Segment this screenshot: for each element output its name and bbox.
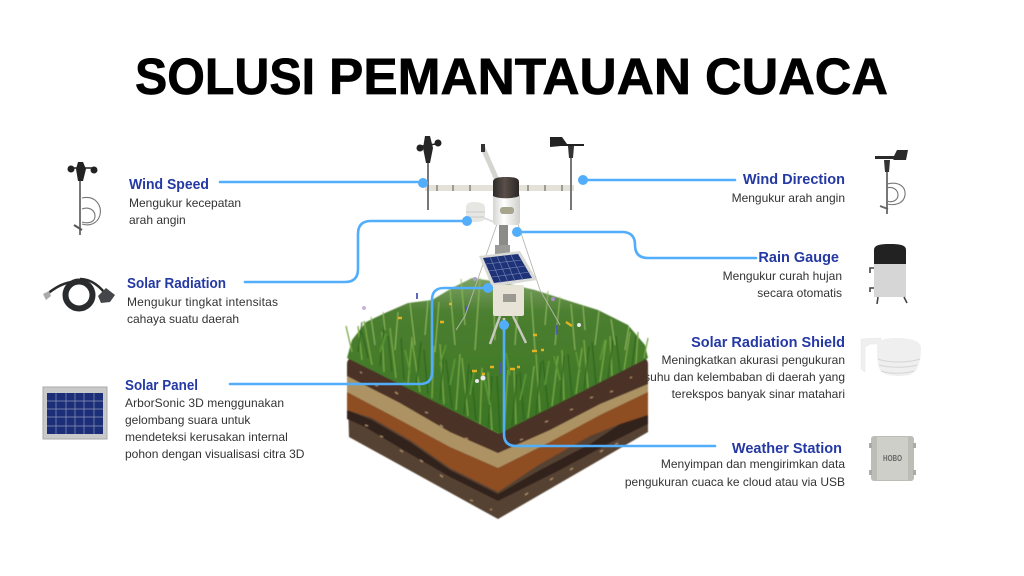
station solar panel bbox=[479, 251, 537, 287]
title: PEMANTAUAN bbox=[329, 48, 691, 105]
description: solar radiation: cahaya suatu daerah bbox=[127, 312, 239, 326]
title: CUACA bbox=[705, 48, 888, 105]
description: rain gauge: secara otomatis bbox=[757, 286, 842, 300]
connector: wind speed bbox=[220, 178, 428, 188]
panel: wind speed text bbox=[129, 177, 241, 227]
wind speed sensor on arm bbox=[416, 136, 442, 210]
panel: solar radiation shield text bbox=[644, 335, 845, 401]
icon: solar radiation shield product bbox=[861, 338, 921, 376]
connector: solar panel bbox=[230, 283, 493, 384]
description: solar panel: pohon dengan visualisasi citra 3D bbox=[125, 447, 305, 461]
connector: wind direction bbox=[578, 175, 735, 185]
wind direction sensor on arm bbox=[550, 137, 584, 210]
description: solar radiation shield: suhu dan kelembaban di daerah yang bbox=[644, 370, 845, 384]
guy wires bbox=[456, 224, 560, 330]
panel: rain gauge text bbox=[723, 250, 842, 300]
panel: solar radiation text bbox=[127, 276, 278, 326]
grass top bbox=[346, 278, 648, 434]
heading: wind speed: Wind Speed bbox=[129, 177, 209, 193]
illustration: soil block with grass and weather station bbox=[346, 136, 648, 519]
icon: HOBO weather station box: HOBO bbox=[883, 454, 902, 463]
station logger box bbox=[493, 285, 524, 316]
icon: solar panel product bbox=[43, 387, 107, 439]
tripod bbox=[490, 316, 526, 344]
icon: rain gauge bbox=[870, 244, 907, 304]
icon: anemometer bbox=[68, 162, 100, 235]
description: wind speed: Mengukur kecepatan bbox=[129, 196, 241, 210]
panel: solar panel text bbox=[125, 378, 305, 461]
icon: wind vane bbox=[875, 150, 908, 214]
connector: rain gauge bbox=[512, 227, 756, 258]
description: wind speed: arah angin bbox=[129, 213, 186, 227]
description: solar panel: ArborSonic 3D menggunakan bbox=[125, 396, 284, 410]
panel: weather station text bbox=[625, 441, 845, 489]
heading: solar panel: Solar Panel bbox=[125, 378, 198, 394]
soil block bbox=[347, 357, 648, 519]
heading: wind direction: Wind Direction bbox=[743, 172, 845, 188]
icon: solar radiation sensor with cable bbox=[43, 279, 115, 308]
description: wind direction: Mengukur arah angin bbox=[732, 191, 845, 205]
icon: HOBO weather station box bbox=[869, 436, 916, 481]
connector: solar radiation bbox=[245, 216, 472, 282]
description: weather station: Menyimpan dan mengirimkan data bbox=[661, 457, 845, 471]
small solar radiation shield on station bbox=[466, 202, 494, 222]
description: solar radiation shield: Meningkatkan akurasi pengukuran bbox=[662, 353, 845, 367]
heading: solar radiation shield: Solar Radiation Shield bbox=[691, 335, 845, 351]
description: solar radiation shield: terekspos banyak sinar matahari bbox=[672, 387, 845, 401]
title: SOLUSI bbox=[135, 48, 315, 105]
description: solar panel: mendeteksi kerusakan internal bbox=[125, 430, 288, 444]
connector: weather station bbox=[499, 320, 715, 446]
description: weather station: pengukuran cuaca ke cloud atau via USB bbox=[625, 475, 845, 489]
weather station mast and crossarm bbox=[425, 144, 574, 255]
heading: rain gauge: Rain Gauge bbox=[758, 250, 839, 266]
description: rain gauge: Mengukur curah hujan bbox=[723, 269, 842, 283]
description: solar panel: gelombang suara untuk bbox=[125, 413, 251, 427]
panel: wind direction text bbox=[732, 172, 845, 205]
description: solar radiation: Mengukur tingkat intensitas bbox=[127, 295, 278, 309]
heading: weather station: Weather Station bbox=[732, 441, 842, 457]
heading: solar radiation: Solar Radiation bbox=[127, 276, 226, 292]
flowers in grass bbox=[362, 277, 581, 383]
